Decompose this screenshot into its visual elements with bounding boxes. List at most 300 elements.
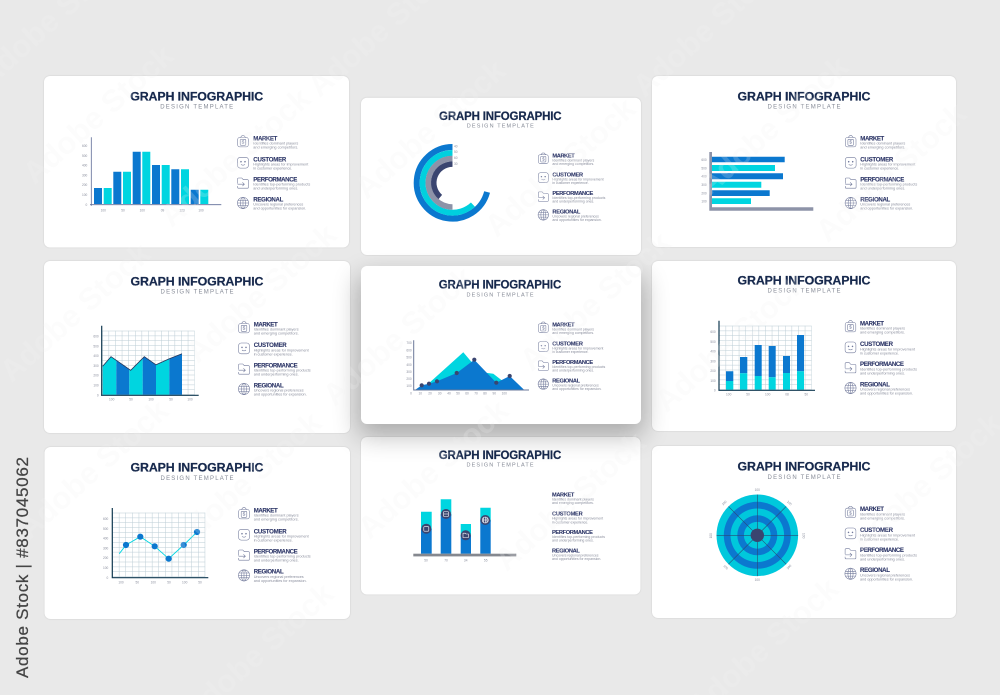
legend: market: and emerging competitors. (253, 146, 298, 150)
segmented area chart: 400 (93, 354, 99, 358)
legend: performance: PERFORMANCE (860, 176, 904, 183)
line chart: 200 (103, 556, 109, 560)
grouped bar chart: 100 (82, 193, 88, 197)
legend: market: Identifies dominant players (254, 514, 299, 518)
legend: regional: Uncovers regional preferences (860, 573, 910, 577)
mountain area chart: 700 (406, 341, 412, 345)
legend: performance (538, 191, 606, 204)
legend: market: Identifies dominant players (860, 327, 905, 331)
legend: performance (845, 547, 917, 561)
legend: regional: and opportunities for expansion. (254, 579, 307, 583)
heading: GRAPH INFOGRAPHIC (738, 90, 871, 104)
horizontal bar chart: 600 (701, 158, 707, 162)
legend: customer: CUSTOMER (552, 512, 583, 518)
panel: segmented area chart (44, 261, 350, 433)
radial bar chart (417, 144, 487, 219)
radial bar chart: 30 (454, 162, 458, 166)
legend: regional (238, 382, 307, 397)
legend: market: MARKET (552, 153, 575, 159)
stacked column chart: 400 (710, 350, 716, 354)
legend: regional: Uncovers regional preferences (860, 203, 910, 207)
heading: DESIGN TEMPLATE (466, 463, 534, 469)
panel: mountain area chart (highlighted) (361, 266, 641, 424)
legend: performance: PERFORMANCE (860, 361, 904, 368)
legend: regional: and opportunities for expansion. (254, 393, 307, 397)
segmented area chart: 600 (93, 334, 99, 338)
heading: DESIGN TEMPLATE (466, 292, 534, 298)
legend: performance: Identifies top-performing products (552, 365, 605, 369)
legend: performance: Identifies top-performing products (860, 367, 917, 371)
legend: performance (845, 176, 917, 191)
line chart: 100 (118, 580, 124, 584)
panel: target radar chart (652, 446, 956, 618)
stacked column chart: 500 (710, 340, 716, 344)
heading: GRAPH INFOGRAPHIC (130, 274, 264, 288)
heading (439, 111, 562, 129)
legend: regional: REGIONAL (253, 196, 284, 203)
segmented area chart: 50 (129, 398, 133, 402)
heading: DESIGN TEMPLATE (768, 105, 840, 111)
mountain area chart: 50 (456, 392, 460, 396)
card background (44, 261, 350, 433)
segmented area chart: 200 (93, 374, 99, 378)
legend: regional: and opportunities for expansion. (860, 577, 913, 581)
stacked column chart: 50 (746, 392, 750, 396)
legend: market: and emerging competitors. (860, 331, 905, 335)
legend: market (845, 320, 905, 335)
legend: market: MARKET (860, 506, 884, 513)
legend: market: MARKET (860, 320, 884, 327)
legend: market: and emerging competitors. (254, 518, 299, 522)
stacked column chart: 50 (805, 392, 808, 396)
legend: customer: in customer experience. (552, 181, 589, 185)
legend: regional: Uncovers regional preferences (552, 214, 599, 218)
legend: market: MARKET (254, 507, 278, 514)
legend: market: Identifies dominant players (253, 142, 298, 146)
watermarks: Adobe Stock (348, 52, 513, 206)
legend: performance (238, 176, 310, 191)
target radar chart: 100 (709, 533, 713, 538)
legend: regional: REGIONAL (860, 196, 891, 203)
stacked column chart: 0 (714, 388, 716, 392)
legend: regional (538, 378, 602, 391)
mountain area chart: 600 (406, 348, 412, 352)
legend: regional: REGIONAL (860, 381, 890, 388)
stacked column chart: 100 (726, 392, 732, 396)
heading (130, 461, 264, 482)
heading: GRAPH INFOGRAPHIC (439, 450, 561, 462)
watermarks: Adobe Stock (179, 216, 344, 370)
legend: market: Identifies dominant players (860, 512, 905, 516)
mountain area chart: 0 (410, 392, 412, 396)
panel: horizontal bar chart (652, 76, 956, 247)
legend: regional: REGIONAL (552, 548, 580, 554)
legend: market: MARKET (552, 322, 575, 328)
mountain area chart: 100 (406, 384, 412, 388)
legend: customer (552, 512, 603, 524)
segmented area chart: 100 (187, 398, 193, 402)
card background (44, 447, 350, 619)
horizontal bar chart: 100 (701, 200, 707, 204)
heading (738, 460, 871, 481)
legend: customer (239, 342, 310, 356)
card background (361, 437, 640, 594)
legend: performance (538, 360, 605, 373)
legend: customer (538, 341, 603, 354)
watermarks: Adobe Stock (691, 48, 856, 202)
radial bar chart: 60 (454, 156, 458, 160)
legend: customer: CUSTOMER (254, 342, 287, 349)
card background (361, 98, 641, 255)
legend: regional: Uncovers regional preferences (254, 575, 304, 579)
legend: regional: and opportunities for expansion. (552, 557, 601, 561)
watermarks: Adobe Stock (513, 224, 678, 378)
card background (361, 266, 641, 424)
legend: regional (238, 569, 307, 583)
legend: customer: CUSTOMER (552, 341, 583, 347)
legend: customer: in customer experience. (552, 520, 588, 524)
legend: performance: PERFORMANCE (552, 530, 593, 536)
legend: performance (239, 362, 311, 377)
heading: DESIGN TEMPLATE (160, 290, 234, 296)
column chart with icons (413, 499, 516, 562)
legend: customer: CUSTOMER (254, 528, 287, 535)
horizontal bar chart (701, 152, 813, 211)
legend: customer: Highlights areas for improvement (552, 177, 604, 181)
legend: regional: and opportunities for expansion. (860, 207, 913, 211)
panel: line chart (44, 447, 350, 619)
legend: customer: Highlights areas for improvement (860, 347, 916, 351)
legend: market (845, 135, 905, 150)
legend: market: Identifies dominant players (552, 158, 594, 162)
legend: regional: Uncovers regional preferences (552, 553, 599, 557)
horizontal bar chart: 500 (701, 166, 707, 170)
legend: regional: REGIONAL (552, 209, 581, 215)
legend: regional (237, 196, 306, 211)
segmented area chart: 300 (93, 364, 99, 368)
legend: regional: Uncovers regional preferences (253, 203, 303, 207)
legend: customer: Highlights areas for improvement (254, 535, 310, 539)
legend: customer: in customer experience. (552, 350, 589, 354)
legend: market: and emerging competitors. (552, 501, 594, 505)
legend: market (538, 153, 594, 166)
mountain area chart: 300 (406, 370, 412, 374)
segmented area chart: 100 (93, 384, 99, 388)
legend: market: MARKET (253, 135, 278, 142)
panel: stacked column chart (652, 261, 956, 431)
legend: regional: and opportunities for expansion. (552, 218, 602, 222)
legend: performance: and underperforming ones. (860, 187, 905, 191)
heading: GRAPH INFOGRAPHIC (439, 111, 562, 123)
legend: performance: and underperforming ones. (552, 539, 594, 543)
legend: customer: in customer experience. (254, 539, 293, 543)
watermarks: Adobe Stock (351, 392, 516, 546)
line chart: 100 (151, 580, 156, 584)
line chart: 300 (103, 546, 109, 550)
panel: grouped bar chart (44, 76, 349, 248)
heading: GRAPH INFOGRAPHIC (738, 460, 871, 474)
target radar chart: 100 (721, 500, 728, 506)
legend: customer: in customer experience. (860, 167, 899, 171)
legend: market: and emerging competitors. (552, 162, 594, 166)
mountain area chart: 80 (483, 392, 487, 396)
line chart: 400 (103, 537, 109, 541)
mountain area chart: 90 (493, 392, 496, 396)
heading (439, 280, 561, 298)
heading: GRAPH INFOGRAPHIC (738, 274, 871, 288)
stacked column chart (710, 321, 815, 396)
watermarks: Adobe Stock (16, 37, 181, 191)
line chart: 100 (182, 580, 188, 584)
line chart: 500 (103, 527, 109, 531)
legend: performance: and underperforming ones. (253, 187, 298, 191)
legend: customer: CUSTOMER (860, 341, 894, 348)
legend: customer: in customer experience. (253, 167, 292, 171)
mountain area chart: 400 (406, 363, 412, 367)
legend: performance: Identifies top-performing products (253, 183, 310, 187)
legend: performance (552, 530, 605, 543)
horizontal bar chart: 400 (701, 175, 707, 179)
card background (652, 261, 956, 431)
legend: customer: Highlights areas for improvement (254, 348, 310, 352)
legend: market: and emerging competitors. (552, 331, 594, 335)
legend: customer (845, 527, 916, 541)
column chart with icons: 70 (444, 558, 448, 562)
legend: customer: Highlights areas for improvement (552, 346, 603, 350)
heading: GRAPH INFOGRAPHIC (439, 280, 561, 292)
legend: customer: CUSTOMER (860, 527, 894, 534)
legend: market: Identifies dominant players (552, 327, 594, 331)
legend: customer (845, 341, 916, 355)
grouped bar chart: 200 (82, 183, 88, 187)
legend: regional: Uncovers regional preferences (860, 388, 910, 392)
highlighted card shadow (358, 276, 644, 436)
mountain area chart: 10 (419, 392, 422, 396)
legend: regional: and opportunities for expansion. (860, 392, 913, 396)
legend: market: Identifies dominant players (254, 328, 299, 332)
legend: performance: Identifies top-performing products (254, 369, 311, 373)
legend: market: Identifies dominant players (552, 497, 594, 501)
legend: performance: PERFORMANCE (253, 176, 297, 183)
legend: regional: REGIONAL (254, 569, 284, 576)
legend: performance: and underperforming ones. (552, 369, 594, 373)
heading (130, 274, 264, 296)
mountain area chart: 500 (406, 356, 412, 360)
stacked column chart: 100 (710, 379, 716, 383)
heading: DESIGN TEMPLATE (160, 476, 234, 482)
legend: regional: REGIONAL (254, 382, 284, 389)
target radar chart (709, 488, 806, 582)
legend: customer: Highlights areas for improvement (552, 517, 603, 521)
target radar chart: 100 (755, 578, 760, 582)
legend: performance: and underperforming ones. (254, 373, 299, 377)
legend: customer: Highlights areas for improvement (253, 163, 309, 167)
radial bar chart: 40 (454, 144, 458, 148)
legend: market: and emerging competitors. (860, 516, 905, 520)
line chart: 0 (107, 576, 109, 580)
mountain area chart (406, 340, 529, 396)
heading: DESIGN TEMPLATE (768, 475, 840, 481)
line chart: 600 (103, 517, 109, 521)
watermarks: Adobe Stock (153, 80, 318, 234)
heading: DESIGN TEMPLATE (160, 105, 233, 111)
grouped bar chart: 500 (82, 154, 88, 158)
horizontal bar chart: 200 (701, 191, 707, 195)
legend: market (845, 506, 905, 520)
mountain area chart: 20 (428, 392, 432, 396)
legend: market: MARKET (254, 321, 278, 328)
target radar chart: 100 (755, 488, 760, 492)
legend: performance (845, 361, 917, 375)
card background (652, 446, 956, 618)
legend: performance (239, 548, 311, 563)
legend: customer: Highlights areas for improvement (860, 533, 916, 537)
legend: customer: CUSTOMER (860, 156, 894, 163)
legend: customer (538, 172, 604, 185)
segmented area chart: 100 (148, 398, 154, 402)
heading: GRAPH INFOGRAPHIC (130, 461, 264, 475)
legend: customer (239, 528, 310, 543)
grouped bar chart: 100 (101, 208, 106, 212)
heading (738, 90, 871, 111)
legend: performance: and underperforming ones. (254, 559, 299, 563)
legend: regional (538, 209, 602, 222)
legend: regional (845, 381, 913, 396)
legend: performance: Identifies top-performing products (552, 535, 605, 539)
grouped bar chart: 0 (86, 203, 88, 207)
grouped bar chart (82, 137, 221, 212)
segmented area chart: 100 (109, 398, 115, 402)
grouped bar chart: 600 (82, 144, 88, 148)
target radar chart: 100 (786, 564, 792, 570)
heading (130, 90, 263, 111)
segmented area chart: 500 (93, 344, 99, 348)
heading (738, 274, 871, 295)
legend: market: MARKET (552, 492, 575, 498)
legend: market: MARKET (860, 135, 885, 142)
legend: market: and emerging competitors. (860, 146, 905, 150)
radial bar chart: 50 (454, 150, 458, 154)
legend: regional: Uncovers regional preferences (552, 383, 599, 387)
stock id side label: Adobe Stock | #837045062 (13, 457, 32, 678)
mountain area chart: 100 (502, 392, 507, 396)
legend: customer: in customer experience. (860, 351, 899, 355)
mountain area chart: 40 (447, 392, 451, 396)
stacked column chart: 100 (765, 392, 771, 396)
mountain area chart: 70 (474, 392, 478, 396)
column chart with icons: 50 (424, 558, 428, 562)
legend: customer: in customer experience. (254, 352, 293, 356)
grouped bar chart: 300 (82, 173, 88, 177)
legend: market: Identifies dominant players (860, 142, 905, 146)
legend: performance: PERFORMANCE (254, 548, 298, 555)
grouped bar chart: 09 (161, 208, 164, 212)
mountain area chart: 60 (465, 392, 469, 396)
legend: customer (238, 156, 309, 171)
mountain area chart: 30 (438, 392, 442, 396)
legend: regional: and opportunities for expansion. (552, 387, 602, 391)
segmented area chart: 50 (169, 398, 173, 402)
grouped bar chart: 100 (140, 208, 145, 212)
legend: regional (552, 548, 601, 561)
heading: DESIGN TEMPLATE (768, 289, 840, 295)
heading: GRAPH INFOGRAPHIC (130, 90, 263, 104)
legend: performance: Identifies top-performing products (860, 183, 917, 187)
stacked column chart: 600 (710, 330, 716, 334)
legend: customer: CUSTOMER (552, 172, 583, 178)
panel: radial bar chart (361, 98, 641, 255)
legend: market (238, 135, 298, 150)
legend: customer: CUSTOMER (253, 156, 287, 163)
watermarks: Adobe Stock (316, 259, 481, 413)
legend: performance: and underperforming ones. (860, 557, 905, 561)
line chart (103, 508, 208, 584)
legend: performance: and underperforming ones. (860, 371, 905, 375)
legend: performance: PERFORMANCE (860, 547, 904, 554)
legend: performance: Identifies top-performing products (552, 196, 606, 200)
legend: market (538, 322, 594, 335)
watermarks: Adobe Stock (648, 265, 813, 419)
line chart: 50 (136, 580, 139, 584)
heading: DESIGN TEMPLATE (467, 123, 534, 129)
legend: regional: Uncovers regional preferences (254, 389, 304, 393)
legend: regional (845, 567, 913, 581)
target radar chart: 100 (786, 500, 793, 506)
card background (44, 76, 349, 248)
legend: performance: PERFORMANCE (552, 360, 593, 366)
legend: performance: Identifies top-performing products (860, 553, 917, 557)
legend: regional (845, 196, 913, 211)
grouped bar chart: 100 (198, 208, 204, 212)
grouped bar chart: 400 (82, 164, 88, 168)
grouped bar chart: 123 (179, 208, 185, 212)
legend: customer: Highlights areas for improvement (860, 163, 916, 167)
stacked column chart: 08 (785, 392, 789, 396)
target radar chart: 100 (722, 564, 729, 571)
legend: customer (845, 156, 916, 171)
legend: performance: and underperforming ones. (552, 200, 594, 204)
column chart with icons: 55 (484, 558, 488, 562)
legend: regional: REGIONAL (860, 567, 890, 574)
watermarks: Adobe Stock (488, 424, 653, 578)
panel: column chart with icons (361, 437, 640, 594)
segmented area chart: 0 (97, 393, 99, 397)
mountain area chart: 200 (406, 377, 412, 381)
legend: performance: PERFORMANCE (552, 191, 594, 197)
card background (652, 76, 956, 247)
legend: regional: and opportunities for expansion. (253, 207, 306, 211)
stacked column chart: 200 (710, 369, 716, 373)
horizontal bar chart: 300 (701, 183, 707, 187)
line chart: 50 (167, 580, 171, 584)
legend: market (239, 507, 299, 522)
legend: performance: PERFORMANCE (254, 362, 298, 369)
legend: customer: in customer experience. (860, 537, 899, 541)
column chart with icons: 34 (464, 558, 468, 562)
target radar chart: 100 (802, 533, 806, 539)
watermarks: Adobe Stock (11, 392, 176, 546)
grouped bar chart: 50 (121, 208, 125, 212)
legend: market (239, 321, 299, 336)
legend: market (552, 492, 594, 505)
heading (439, 450, 561, 469)
line chart: 50 (198, 580, 202, 584)
line chart: 100 (103, 566, 109, 570)
watermarks: Adobe Stock (478, 90, 643, 244)
stacked column chart: 300 (710, 359, 716, 363)
legend: regional: REGIONAL (552, 378, 581, 385)
legend: performance: Identifies top-performing products (254, 555, 311, 559)
